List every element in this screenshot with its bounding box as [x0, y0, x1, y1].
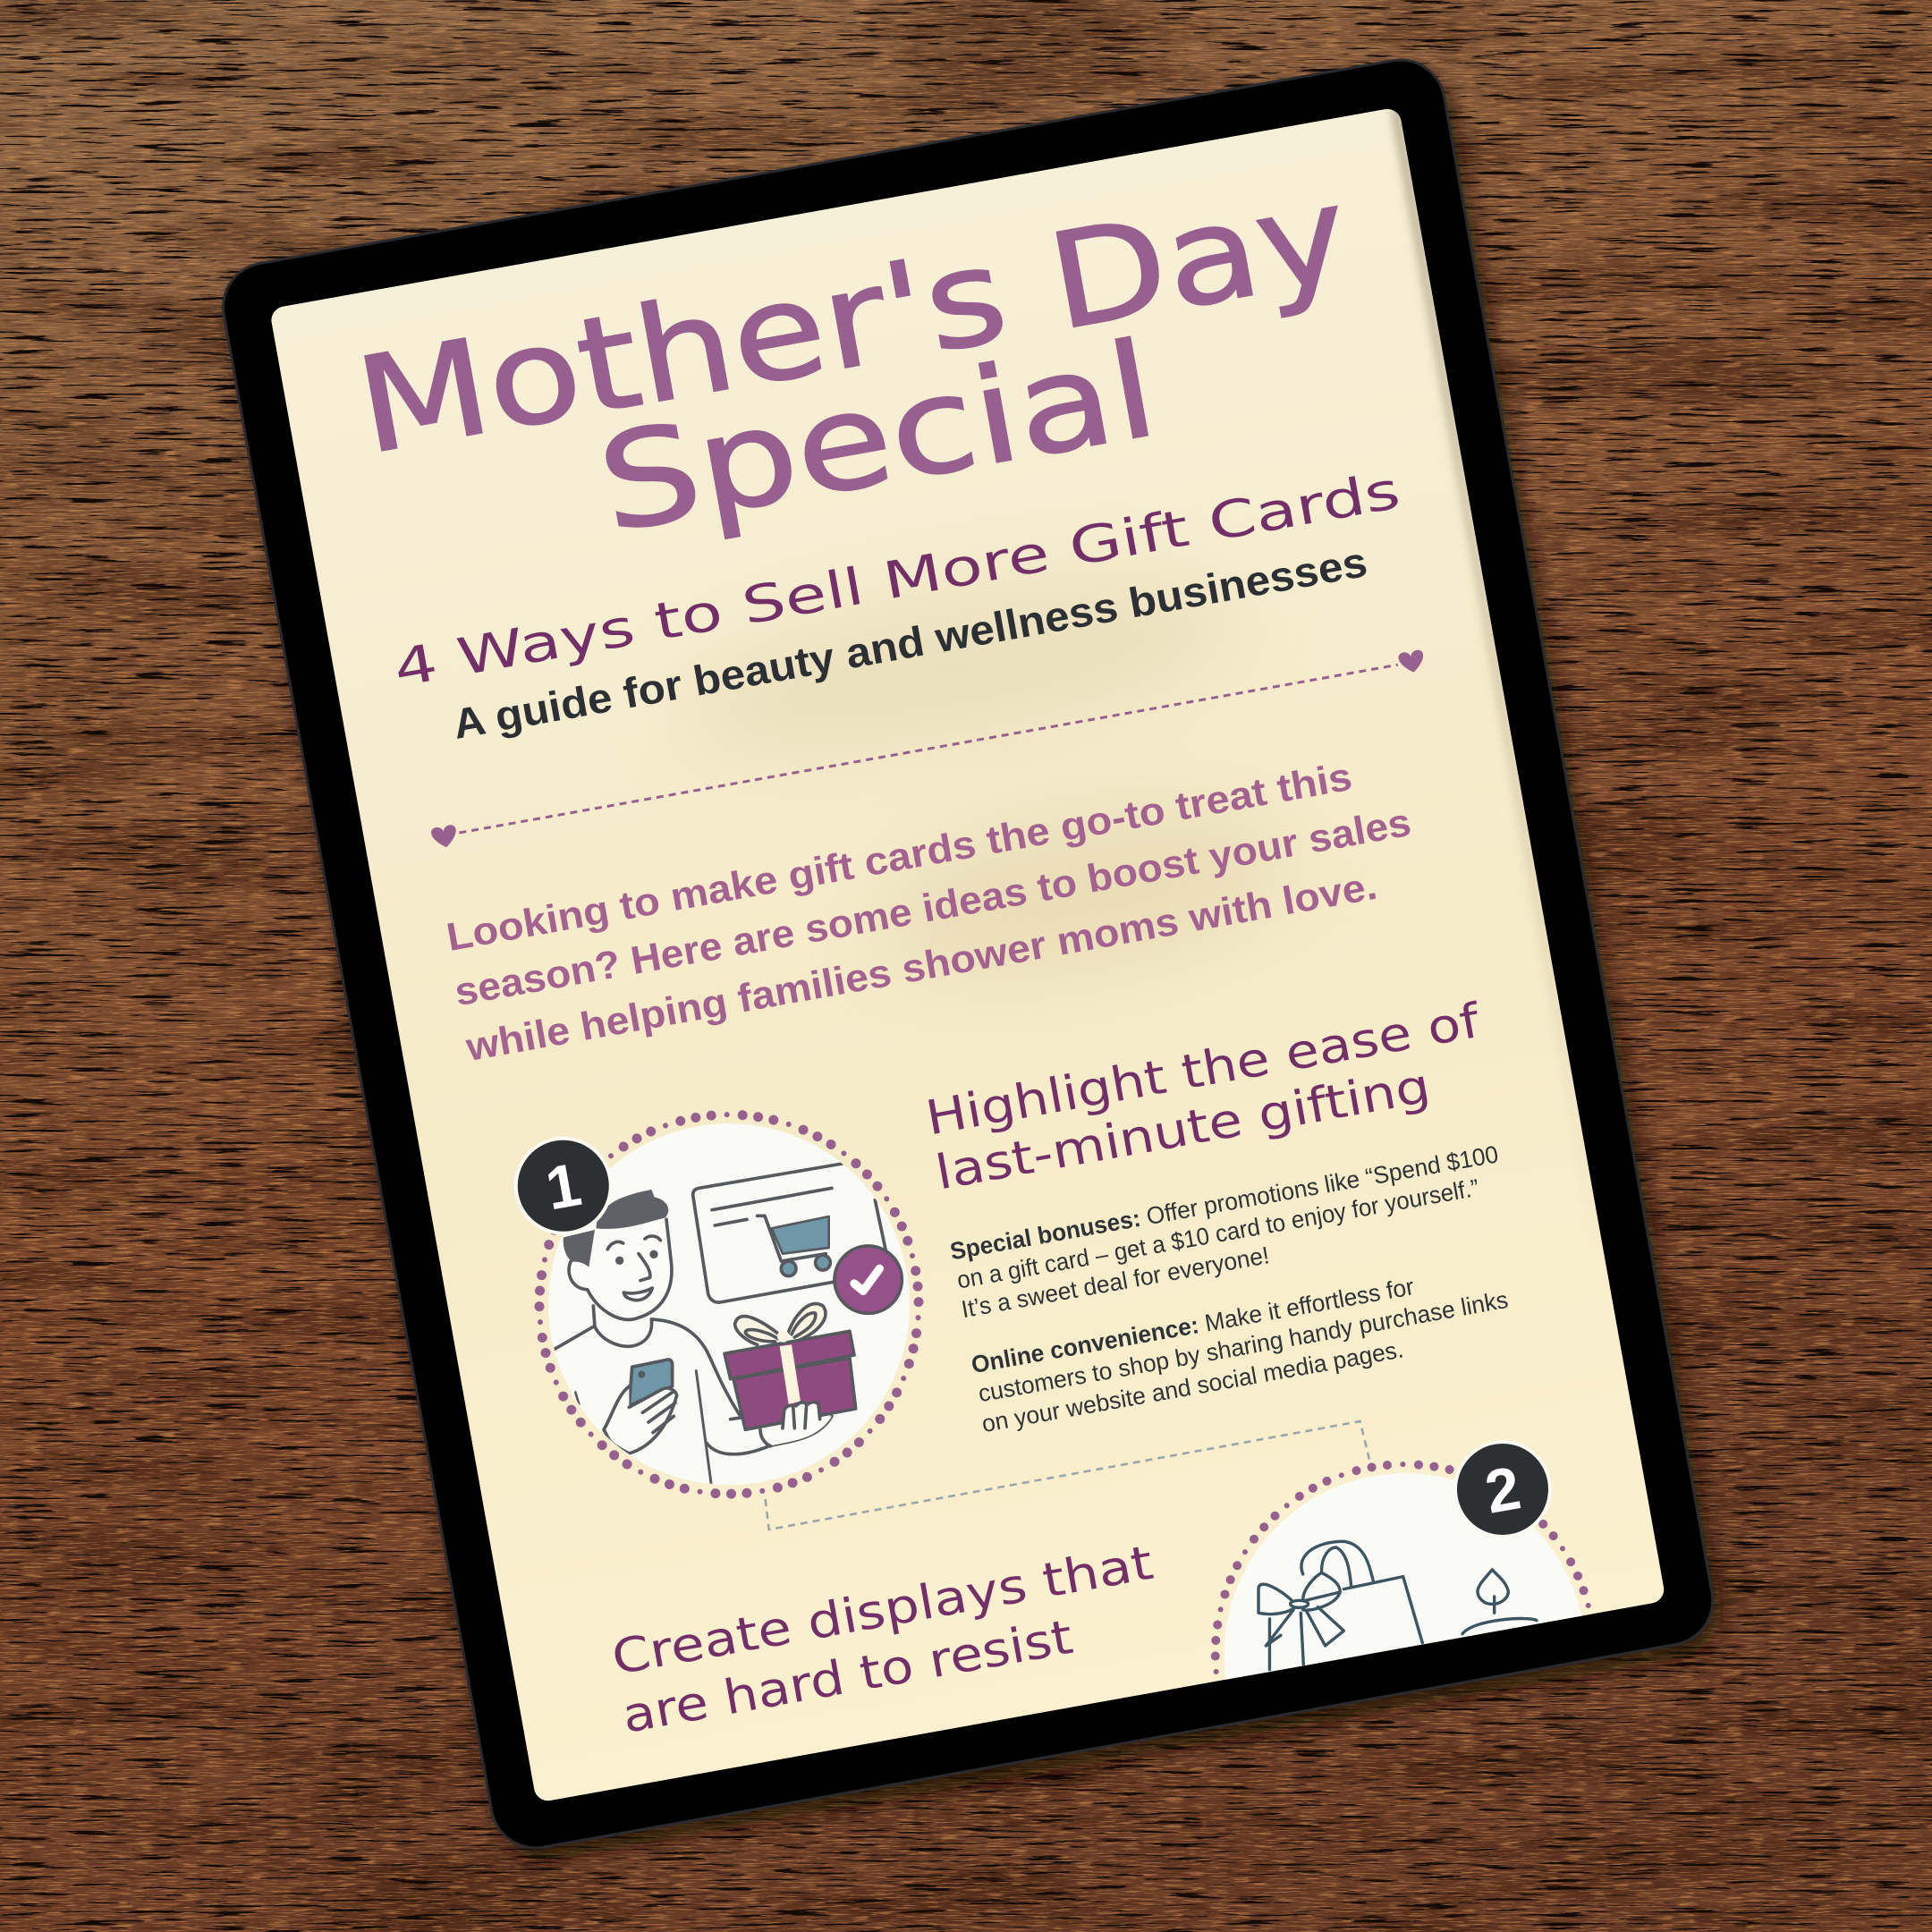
- intro paragraph: season? Here are some ideas to boost your sales: [452, 801, 1414, 1014]
- badge 2: [1447, 1434, 1557, 1544]
- section 1 heading: [922, 994, 1495, 1201]
- title and header text: [364, 206, 1591, 1732]
- section 1 body: Special bonuses: Offer promotions like “Spend $100: [948, 1140, 1500, 1265]
- section 1 heading: last-minute gifting: [932, 1059, 1435, 1201]
- badge 2: 2: [1480, 1453, 1525, 1527]
- section 1 body: It’s a sweet deal for everyone!: [960, 1241, 1271, 1323]
- badge 1: 1: [541, 1150, 586, 1223]
- candle: [1462, 1570, 1537, 1634]
- intro paragraph: Looking to make gift cards the go-to treat this: [444, 755, 1355, 960]
- circle 2 backdrop: [1185, 1434, 1625, 1874]
- man: [555, 1190, 832, 1483]
- heart divider: [430, 649, 1426, 850]
- subtitle: 4 Ways to Sell More Gift Cards: [389, 461, 1404, 699]
- section 1 body: Online convenience: Make it effortless for: [970, 1273, 1416, 1378]
- online store card: [693, 1164, 886, 1302]
- title: Special: [589, 313, 1167, 563]
- gift bag: [1258, 1541, 1422, 1670]
- intro paragraph: [442, 746, 1424, 1070]
- illustration: man buying gift card online: [555, 1164, 902, 1483]
- gift box: [724, 1304, 856, 1446]
- title: [364, 206, 1338, 540]
- section 2 heading: [607, 1536, 1167, 1744]
- section 2 heading: Create displays that: [607, 1536, 1157, 1686]
- illustration: gift bag and candle: [1258, 1541, 1537, 1670]
- section 1 body: [948, 1140, 1531, 1437]
- tablet screen: [269, 106, 1667, 1932]
- section 1 body: on a gift card – get a $10 card to enjoy for yourself.”: [955, 1174, 1481, 1294]
- section 2 heading: are hard to resist: [618, 1610, 1077, 1744]
- connector between steps: [766, 1421, 1369, 1530]
- intro paragraph: while helping families shower moms with love.: [462, 864, 1380, 1070]
- number badges: [508, 978, 1557, 1698]
- audience line: A guide for beauty and wellness businesses: [449, 538, 1370, 748]
- tablet body: [216, 53, 1720, 1855]
- section 1 heading: Highlight the ease of: [922, 994, 1485, 1147]
- section 1 body: customers to shop by sharing handy purchase links: [976, 1286, 1510, 1407]
- phone in hand: [604, 1360, 677, 1453]
- circle 1 backdrop: [509, 1084, 949, 1524]
- title: Mother's Day: [346, 157, 1360, 484]
- screen paper: [269, 106, 1667, 1803]
- check badge: [835, 1246, 902, 1313]
- badge 1: [508, 1131, 618, 1241]
- section 1 body: on your website and social media pages.: [979, 1335, 1405, 1437]
